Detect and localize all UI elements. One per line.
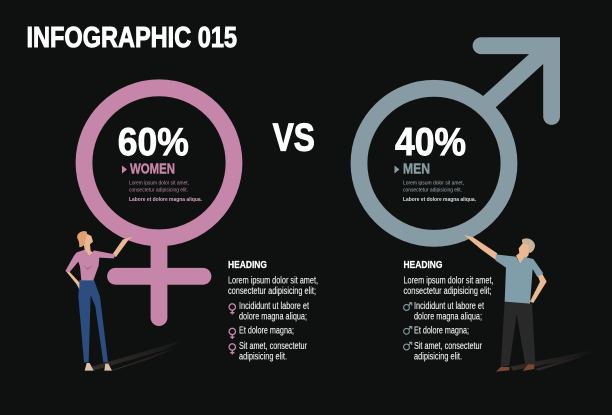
men intro [404, 276, 494, 297]
men intro: Lorem ipsum dolor sit amet, [404, 276, 494, 286]
icon: male symbol [359, 46, 552, 238]
men description: consectetur adipisicing elit. [403, 188, 462, 194]
women item 1: dolore magna aliqua; [239, 312, 307, 322]
men percentage: 40% [395, 121, 466, 164]
figure: woman [65, 231, 183, 371]
icon: male bullet 1 [404, 303, 412, 310]
women description: consectetur adipisicing elit. [129, 188, 188, 194]
women item 3 [239, 341, 307, 362]
panel: women stat [118, 121, 202, 203]
icon: female symbol [84, 88, 234, 318]
icon: male bullet 3 [404, 342, 412, 350]
icon: male bullet 2 [404, 327, 412, 334]
men description: Labore et dolore magna aliqua. [403, 197, 476, 203]
women item 2: Et dolore magna; [239, 326, 294, 336]
icon: women pointer [122, 166, 127, 174]
men item 3: Sit amet, consectetur [414, 341, 482, 352]
women description: Labore et dolore magna aliqua. [129, 197, 202, 203]
men item 3 [414, 341, 482, 362]
men description [403, 180, 476, 203]
women item 1: Incididunt ut labore et [239, 301, 309, 312]
women item 3: Sit amet, consectetur [239, 341, 307, 352]
women intro [228, 276, 318, 297]
women label: WOMEN [130, 160, 175, 178]
women intro: consectetur adipisicing elit; [228, 286, 316, 297]
women item 1 [239, 301, 309, 322]
men intro: consectetur adipisicing elit; [404, 286, 492, 297]
men item 1: Incididunt ut labore et [414, 301, 484, 312]
women description: Lorem ipsum dolor sit amet, [129, 180, 189, 186]
women percentage: 60% [118, 121, 189, 164]
men description: Lorem ipsum dolor sit amet, [403, 180, 464, 186]
icon: female bullet 1 [229, 304, 236, 314]
women item 3: adipisicing elit. [239, 352, 287, 362]
men item 1: dolore magna aliqua; [414, 312, 482, 322]
icon: female bullet 2 [229, 328, 236, 339]
women intro: Lorem ipsum dolor sit amet, [228, 276, 318, 286]
panel: men stat [394, 121, 476, 203]
panel: men list [404, 259, 494, 362]
women description [129, 180, 202, 203]
panel: women list [228, 259, 318, 362]
VS label: VS [273, 116, 315, 160]
men item 3: adipisicing elit. [414, 352, 462, 362]
men item 1 [414, 301, 484, 322]
figure: man [464, 235, 593, 372]
men heading: HEADING [404, 259, 442, 271]
title: INFOGRAPHIC 015 [26, 22, 237, 54]
women heading: HEADING [228, 259, 267, 271]
men item 2: Et dolore magna; [414, 326, 469, 336]
icon: female bullet 3 [229, 344, 236, 354]
icon: men pointer [394, 166, 400, 174]
men label: MEN [403, 160, 430, 178]
